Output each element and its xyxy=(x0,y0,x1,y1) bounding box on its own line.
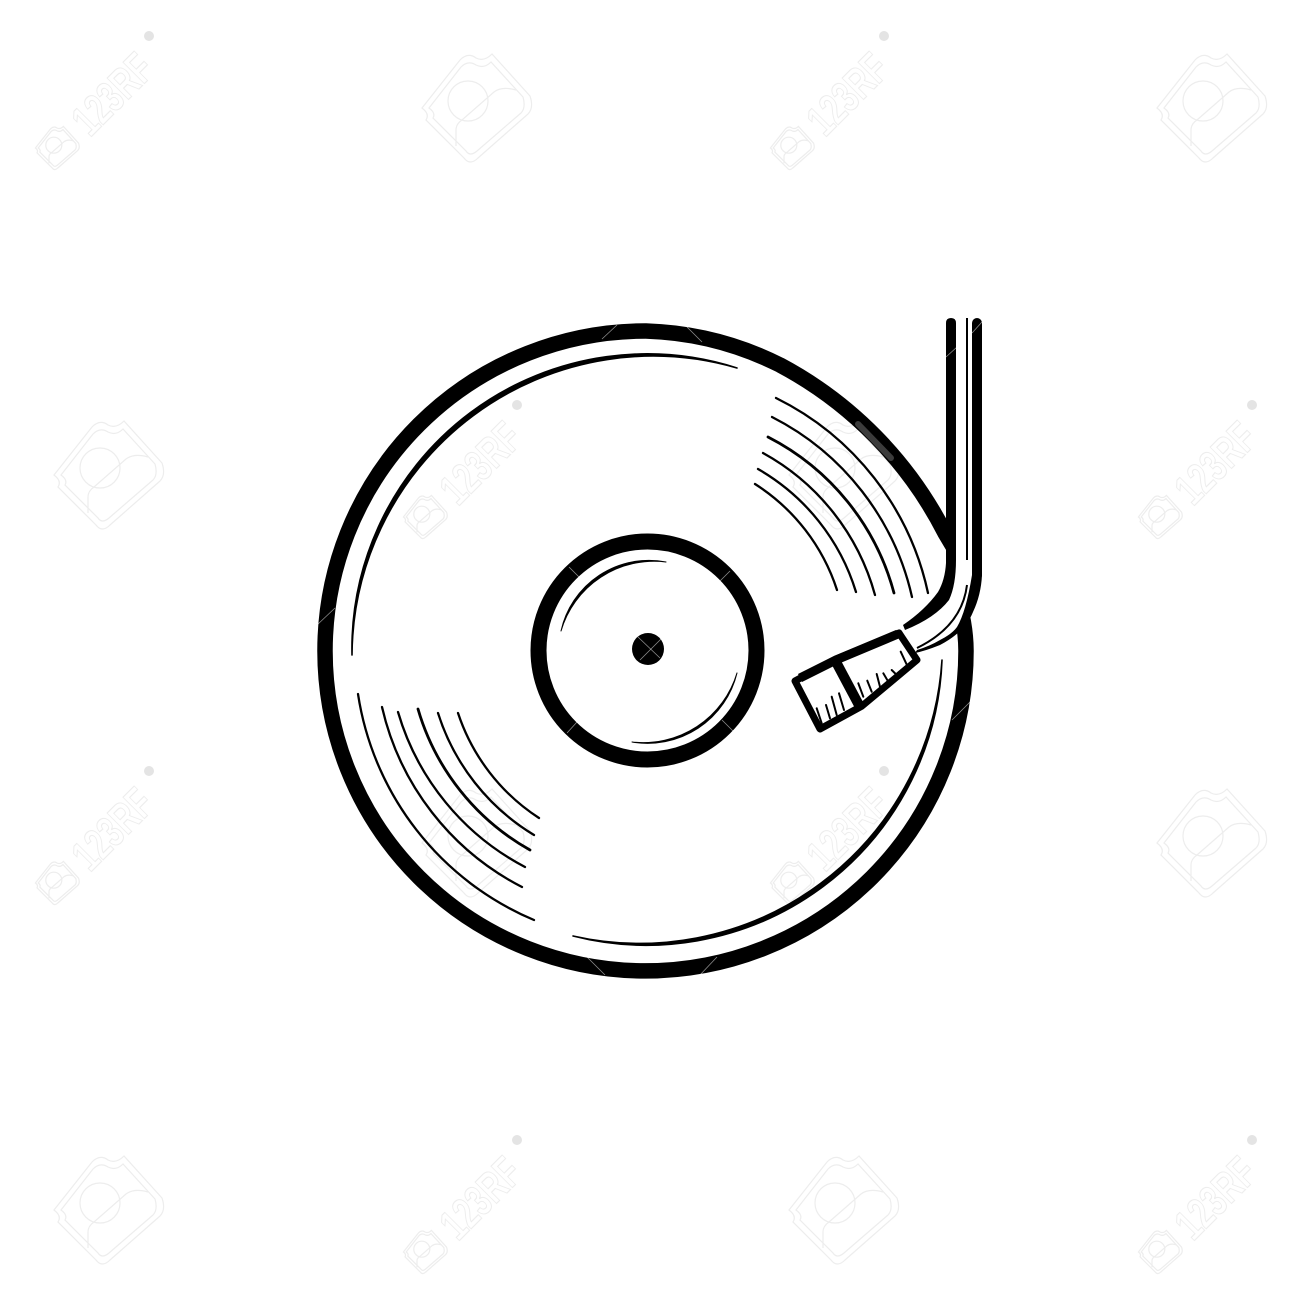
rim highlight: lower right xyxy=(573,660,942,945)
grooves: lower left xyxy=(358,694,539,920)
center label ring xyxy=(538,542,756,760)
label highlight: lower right xyxy=(632,673,737,743)
head tick marks xyxy=(817,652,908,723)
spindle hole xyxy=(632,633,664,665)
record rim xyxy=(325,331,966,971)
label highlight: upper left xyxy=(561,560,666,631)
tonearm xyxy=(903,318,982,653)
tonearm right band xyxy=(972,323,982,575)
tonearm inner curve xyxy=(917,585,967,648)
cartridge head xyxy=(795,633,917,729)
tonearm center line xyxy=(966,318,968,560)
rim highlight: upper left xyxy=(352,354,737,655)
head top edge xyxy=(800,634,898,678)
head shell xyxy=(795,633,917,729)
vinyl record xyxy=(325,331,966,971)
tonearm lower wedge xyxy=(915,575,982,653)
tonearm white body xyxy=(903,318,980,653)
watermark tint on rim xyxy=(858,424,891,458)
tonearm left band xyxy=(903,318,956,630)
head divider xyxy=(835,660,860,707)
watermark hairlines crossing the black strokes xyxy=(317,322,982,976)
grooves: upper right xyxy=(755,398,928,597)
